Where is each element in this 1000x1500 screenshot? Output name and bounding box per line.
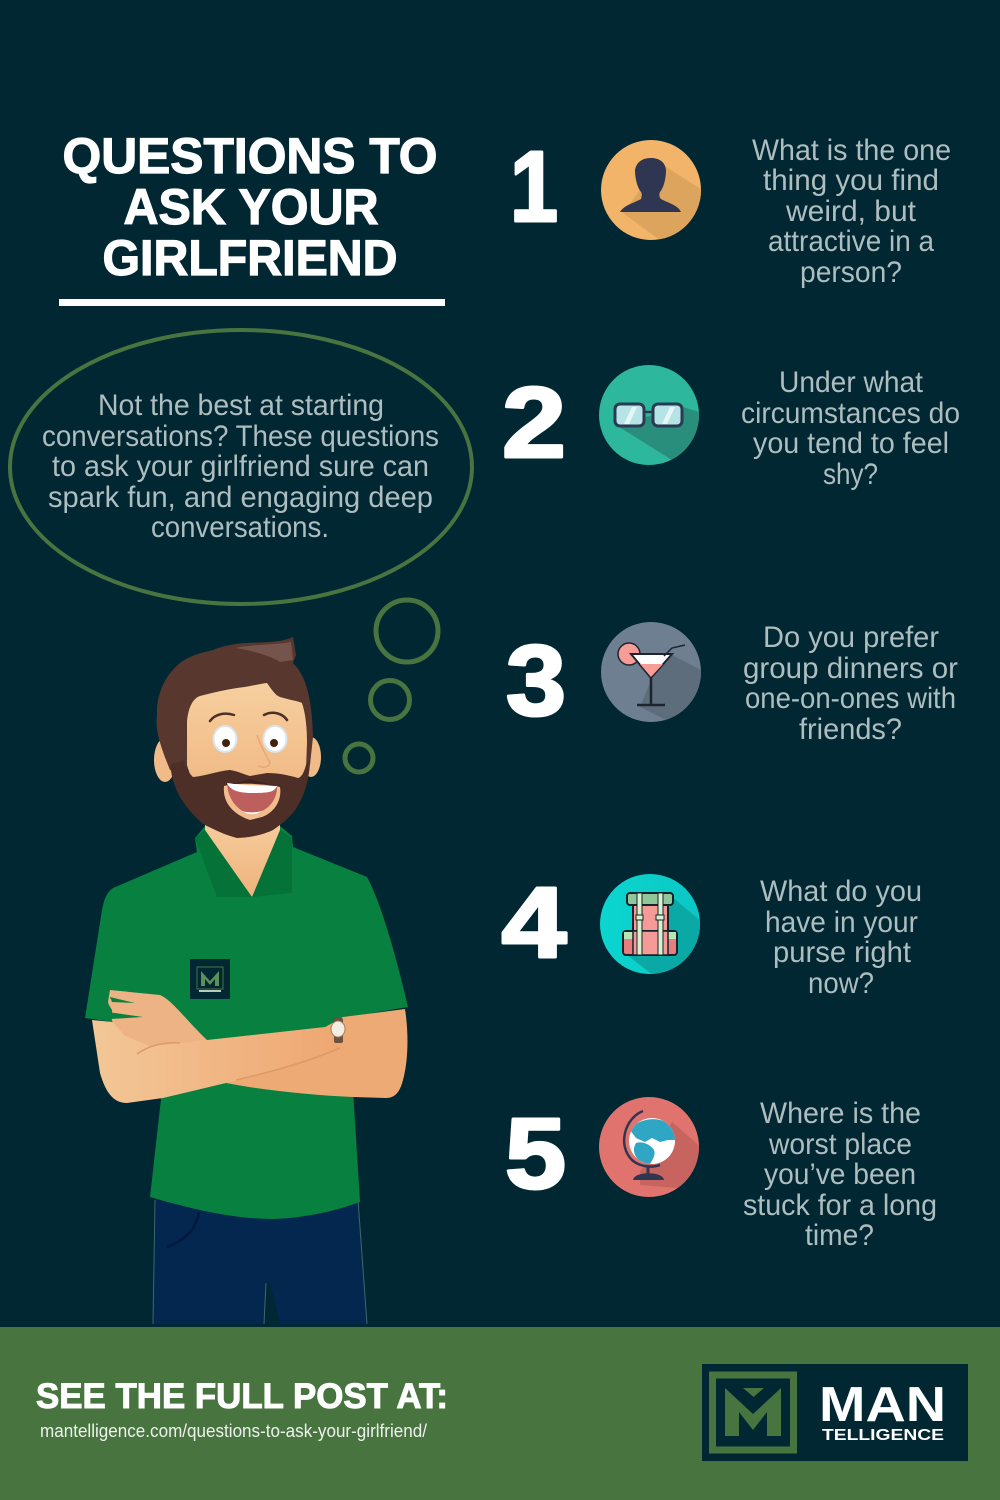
item 2 [502,365,960,491]
question 5: stuck for a long [743,1189,937,1222]
left arm [92,1020,343,1103]
question 5: time? [805,1219,874,1252]
shirt [85,826,408,1219]
number 4: 4 [502,867,567,979]
intro text [42,389,439,544]
beard chin [224,784,280,820]
question 5: worst place [768,1128,912,1161]
arm crease [137,1043,340,1080]
item 5 [505,1097,937,1252]
ears [154,737,321,782]
question 2: you tend to feel [753,427,949,460]
question 3: Do you prefer [763,621,939,654]
icon: backpack [600,874,702,975]
title underline [59,299,445,306]
question 1: What is the one [752,134,951,167]
question 4: have in your [765,906,918,939]
number 1: 1 [510,131,558,243]
question 4: What do you [760,875,922,908]
intro text: conversations? These questions [42,420,439,453]
question 2: circumstances do [741,397,960,430]
intro text: conversations. [151,511,329,544]
icon: globe [599,1097,702,1197]
question 2: Under what [779,366,924,399]
mouth [227,779,277,814]
question 3: friends? [799,713,902,746]
title: QUESTIONS TO [62,128,438,184]
question 1: attractive in a [768,225,934,258]
intro text: Not the best at starting [98,389,384,422]
question 3: one-on-ones with [745,682,956,715]
eyes [212,725,288,753]
question 5: Where is the [760,1097,921,1130]
icon: glasses [599,365,702,465]
question 1: person? [800,256,902,289]
intro text: to ask your girlfriend sure can [52,450,429,483]
man illustration [85,637,408,1324]
title [62,128,438,286]
trousers [153,1200,367,1324]
item 4 [502,874,920,994]
question 4: purse right [773,936,912,969]
footer heading: SEE THE FULL POST AT: [36,1377,448,1416]
thought bubble [10,330,472,772]
right arm [226,1009,407,1098]
title: GIRLFRIEND [102,230,398,286]
question 2 [741,366,960,491]
watch [331,1018,345,1043]
icon: person [601,140,701,240]
neck [205,815,280,897]
logo [702,1364,968,1461]
item 1 [510,131,951,289]
hair [157,637,313,770]
question 5 [743,1097,937,1252]
question 5: you’ve been [764,1158,916,1191]
logo wordmark: TELLIGENCE [822,1427,944,1444]
logo mark [712,1375,794,1450]
question 3: group dinners or [743,652,958,685]
collar [195,830,292,897]
shirt badge [190,959,230,999]
intro text: spark fun, and engaging deep [48,481,433,514]
number 5: 5 [505,1098,566,1210]
question 1 [752,134,951,289]
nose [257,735,270,767]
logo wordmark: MAN [819,1378,946,1432]
thought ellipse [10,330,472,604]
question 4: now? [808,967,874,1000]
icon: cocktail [601,622,705,722]
title: ASK YOUR [124,179,378,235]
footer band [0,1327,1000,1500]
thought circles [345,600,438,772]
beard [170,760,310,838]
eyebrows [210,713,287,721]
question 1: weird, but [785,195,917,228]
question 2: shy? [823,458,878,491]
question 4 [760,875,922,1000]
footer url: mantelligence.com/questions-to-ask-your-girlfriend/ [40,1421,427,1441]
hand [108,990,207,1060]
number 2: 2 [502,367,566,479]
question 1: thing you find [763,164,939,197]
face [187,683,307,820]
number 3: 3 [506,625,566,737]
question 3 [743,621,958,746]
item 3 [506,621,958,746]
